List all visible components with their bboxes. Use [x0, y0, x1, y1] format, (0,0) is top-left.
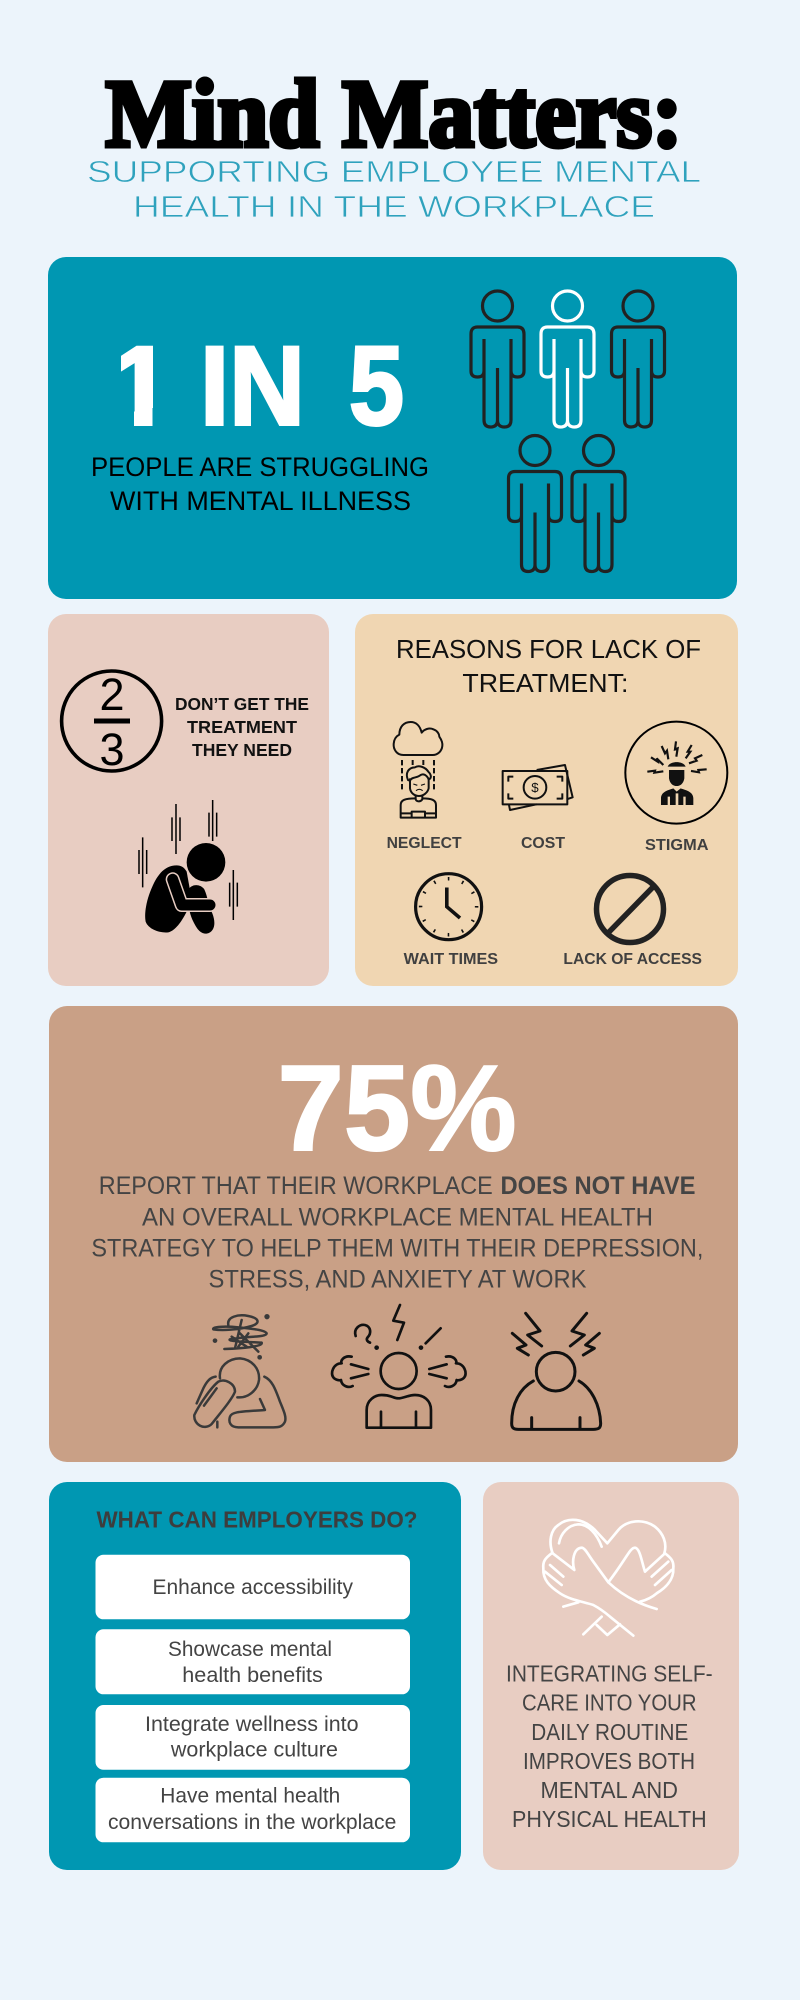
big stat: 1 in 5	[121, 346, 403, 427]
stat description: AN OVERALL WORKPLACE MENTAL HEALTH	[142, 1204, 653, 1232]
card: mental health conversations: conversations in the workplace	[108, 1811, 396, 1834]
subtitle: SUPPORTING EMPLOYEE MENTAL	[87, 154, 701, 189]
card: integrate wellness: Integrate wellness into	[145, 1713, 359, 1736]
employers heading: WHAT CAN EMPLOYERS DO?	[96, 1506, 418, 1532]
stat caption: WITH MENTAL ILLNESS	[110, 486, 411, 516]
reasons heading: TREATMENT:	[462, 668, 628, 698]
icon: five people, one highlighted	[471, 291, 664, 572]
panel: 1 in 5	[48, 257, 737, 599]
card: enhance accessibility: Enhance accessibility	[152, 1576, 353, 1599]
icon: arms hugging heart	[543, 1520, 673, 1636]
reason labels: WAIT TIMES	[404, 951, 498, 968]
icon: banknotes	[503, 765, 573, 810]
big stat: 1 in 5: IN	[200, 324, 305, 448]
icon: person under rain cloud	[394, 722, 442, 818]
icon: stressed person with bolts	[512, 1313, 601, 1429]
panel: self-care	[483, 1482, 739, 1870]
self-care text: IMPROVES BOTH	[523, 1748, 695, 1774]
panel: reasons for lack of treatment	[355, 614, 738, 986]
subtitle	[87, 154, 701, 224]
reason labels: NEGLECT	[387, 835, 462, 852]
stat description: REPORT THAT THEIR WORKPLACE	[99, 1172, 493, 1200]
reason labels: LACK OF ACCESS	[563, 951, 702, 968]
reason labels: COST	[521, 835, 565, 852]
stat description: DOES NOT HAVE	[500, 1172, 696, 1200]
self-care text: INTEGRATING SELF-	[506, 1661, 713, 1687]
stat description: STRESS, AND ANXIETY AT WORK	[208, 1266, 587, 1294]
panel: 75 percent	[49, 1006, 738, 1462]
big stat: 75%: 75%	[278, 1040, 516, 1176]
reasons heading	[396, 634, 701, 698]
subtitle: HEALTH IN THE WORKPLACE	[133, 189, 655, 224]
self-care text: CARE INTO YOUR	[522, 1690, 697, 1716]
two thirds caption: TREATMENT	[187, 717, 297, 737]
reason labels: STIGMA	[645, 837, 709, 854]
icon: depressed person with scribble	[194, 1314, 285, 1427]
two thirds caption: DON’T GET THE	[175, 694, 309, 714]
self-care text	[506, 1661, 713, 1832]
icon: banknotes: $	[531, 780, 539, 795]
self-care text: PHYSICAL HEALTH	[512, 1806, 707, 1832]
card: mental health conversations: Have mental health	[160, 1785, 340, 1808]
two thirds caption	[175, 694, 309, 760]
icon: two thirds fraction: 2	[99, 669, 125, 720]
icon: no access symbol	[596, 876, 664, 942]
icon: clock	[416, 874, 482, 940]
icon: frustrated person with steam	[332, 1305, 466, 1428]
stat caption: PEOPLE ARE STRUGGLING	[91, 452, 429, 482]
card: mental health conversations	[96, 1778, 410, 1842]
self-care text: MENTAL AND	[540, 1777, 678, 1803]
card: integrate wellness	[96, 1705, 410, 1770]
big stat: 1 in 5: 5	[349, 324, 404, 448]
reason labels	[387, 835, 709, 968]
panel: two thirds	[48, 614, 329, 986]
reasons heading: REASONS FOR LACK OF	[396, 634, 701, 664]
card: showcase benefits: health benefits	[182, 1664, 323, 1687]
stat description	[91, 1172, 703, 1294]
two thirds caption: THEY NEED	[192, 740, 292, 760]
card: integrate wellness: workplace culture	[170, 1739, 338, 1762]
card: showcase benefits	[96, 1629, 410, 1694]
card: showcase benefits: Showcase mental	[168, 1638, 332, 1661]
big stat: 1 in 5: 1	[110, 324, 172, 448]
stat caption	[91, 452, 429, 516]
self-care text: DAILY ROUTINE	[531, 1719, 688, 1745]
title: Mind Matters:	[106, 60, 682, 167]
icon: two thirds fraction: 3	[99, 724, 125, 775]
icon: two thirds fraction	[62, 669, 162, 775]
icon: stigma head with bolts	[625, 722, 727, 824]
card: enhance accessibility	[96, 1555, 410, 1619]
panel: what can employers do	[49, 1482, 461, 1870]
stat description: STRATEGY TO HELP THEM WITH THEIR DEPRESSION,	[91, 1235, 703, 1263]
icon: crouching person	[139, 800, 237, 934]
